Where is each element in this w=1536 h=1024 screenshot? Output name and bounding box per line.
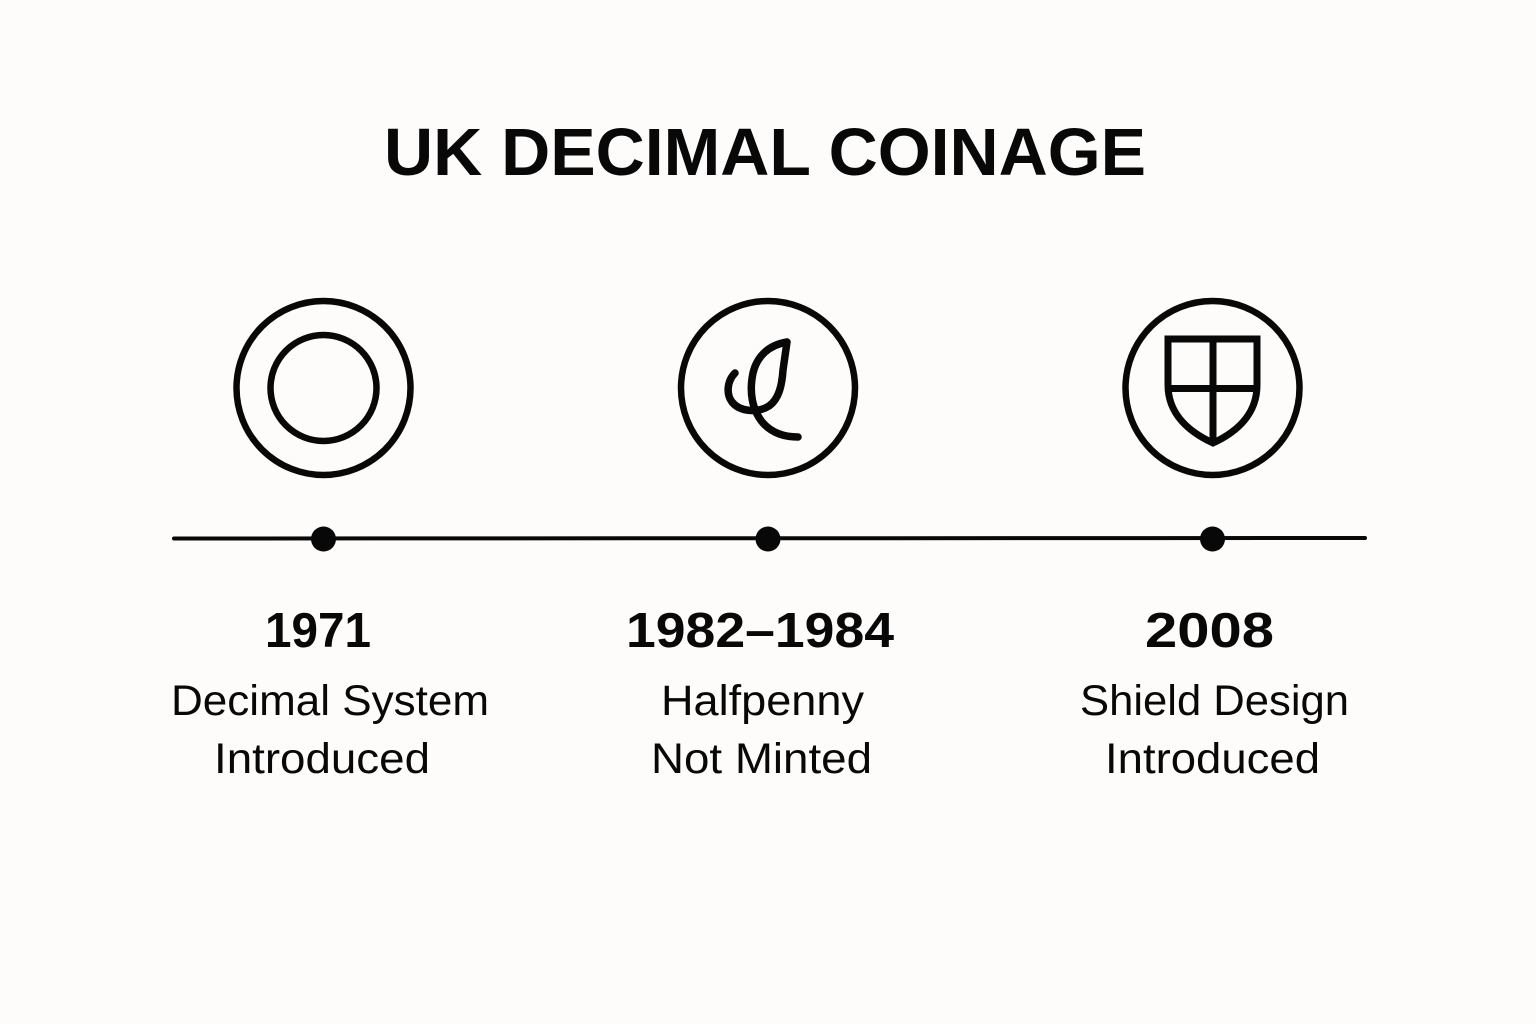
milestone: 2008: Shield Design [1080,677,1349,725]
milestone: 1982–1984: Halfpenny [661,677,865,725]
milestone: 1971 [171,604,489,783]
milestone: 2008: 2008 [1145,604,1274,658]
milestone: 1982–1984: Not Minted [651,735,872,783]
milestone: 1971: 1971 [265,604,371,658]
milestone: 2008 [1080,604,1349,783]
marker: 1971 [311,526,336,552]
icon: shield coin [1126,301,1300,475]
milestone: 1982–1984 [626,604,894,783]
milestone: 1982–1984: 1982–1984 [626,604,894,658]
marker: 2008 [1200,526,1225,552]
icon: decimal coin, concentric circles [236,301,410,475]
milestone: 1971: Decimal System [171,677,489,725]
timeline [174,526,1365,552]
title: UK DECIMAL COINAGE [384,115,1146,190]
milestone: 2008: Introduced [1105,735,1320,783]
icon: halfpenny coin with leaf [681,301,855,475]
marker: 1982–1984 [756,526,780,552]
milestone: 1971: Introduced [214,735,430,783]
